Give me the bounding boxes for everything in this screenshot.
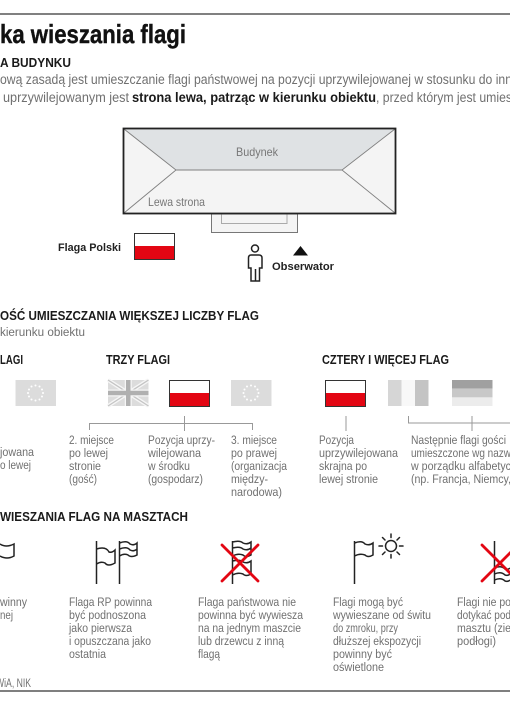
label: left side: Lewa strona (148, 195, 205, 209)
caption: o lewej (0, 458, 31, 472)
intro text (0, 72, 510, 106)
heading: four or more flags: CZTERY I WIĘCEJ FLAG (322, 352, 449, 367)
flag: Poland (134, 234, 174, 260)
caption (457, 595, 510, 648)
caption: lub drzewcu z inną (198, 634, 284, 648)
caption: powinny być (333, 647, 392, 661)
group: three flags (69, 352, 287, 499)
label: observer: Obserwator (272, 261, 335, 273)
caption: privileged centre (147, 433, 215, 486)
flag: EU (16, 380, 56, 406)
rule: no touching ground (457, 541, 510, 648)
rule: dawn to dusk (332, 534, 431, 674)
building roof (124, 128, 396, 214)
icon: flag and sun (354, 534, 403, 584)
caption: second place: po lewej (69, 446, 108, 460)
flag: EU right (231, 380, 272, 406)
caption (0, 595, 28, 622)
caption: third place: (organizacja (231, 459, 287, 473)
caption: third place: 3. miejsce (231, 433, 277, 447)
caption: wywieszane od świtu (332, 608, 431, 622)
caption: dłuższej ekspozycji (333, 634, 421, 648)
caption: privileged centre: (gospodarz) (148, 472, 203, 486)
caption: Flaga państwowa nie (198, 595, 296, 609)
caption (198, 595, 303, 661)
caption: na na jednym maszcie (198, 621, 301, 635)
caption: second place (69, 433, 114, 486)
flag: Germany grey (452, 380, 492, 406)
caption: third place: między- (231, 472, 268, 486)
caption (332, 595, 431, 674)
label: Polish flag: Flaga Polski (58, 242, 121, 254)
rule: first raised (68, 541, 152, 661)
caption: guest flags (410, 433, 510, 486)
icon: crossed drooping flag (482, 541, 510, 584)
caption: do zmroku, przy (333, 621, 399, 635)
flag: Poland centre (170, 380, 210, 406)
caption: i opuszczana jako (69, 634, 151, 648)
icon: flag (0, 544, 14, 558)
heading: mast rules: WIESZANIA FLAG NA MASZTACH (0, 509, 188, 524)
caption (68, 595, 152, 661)
flag: France grey (388, 380, 428, 406)
heading: building section: A BUDYNKU (0, 55, 71, 70)
flag: Poland left (326, 380, 366, 406)
intro text: strona lewa, patrząc w kierunku obiektu (132, 90, 376, 106)
icon: observer (248, 245, 262, 281)
caption: privileged left: skrajna po (319, 459, 367, 473)
caption: winny (0, 595, 28, 609)
bracket (408, 416, 510, 431)
heading: three flags: TRZY FLAGI (106, 352, 170, 367)
heading: multiple flags: OŚĆ UMIESZCZANIA WIĘKSZEJ LICZBY FLAG (0, 308, 259, 323)
flag: UK (108, 380, 148, 406)
rule: partial first column (0, 544, 28, 622)
caption: privileged centre: w środku (147, 459, 190, 473)
caption: Flagi mogą być (333, 595, 403, 609)
caption: privileged centre: wilejowana (147, 446, 201, 460)
caption: podłogi) (457, 634, 496, 648)
icon: direction triangle (293, 246, 308, 256)
caption: second place: 2. miejsce (69, 433, 114, 447)
building plan diagram (124, 128, 396, 232)
group: four or more flags (319, 352, 510, 486)
building entrance (212, 214, 298, 232)
caption: jako pierwsza (68, 621, 132, 635)
intro text: uprzywilejowanym jest (3, 90, 129, 106)
caption: ostatnia (69, 647, 106, 661)
bracket (90, 416, 252, 431)
group: two flags (0, 352, 56, 472)
subheading: kierunku obiektu (0, 325, 85, 339)
caption (0, 445, 34, 472)
caption: third place: po prawej (231, 446, 277, 460)
caption: być podnoszona (69, 608, 146, 622)
caption: third place: narodowa) (231, 485, 282, 499)
caption: privileged left: lewej stronie (319, 472, 378, 486)
caption: flagą (198, 647, 220, 661)
caption: jowana (0, 445, 34, 459)
caption: second place: stronie (69, 459, 101, 473)
caption: privileged left: uprzywilejowana (319, 446, 398, 460)
caption: third place (231, 433, 287, 499)
caption: nej (0, 608, 13, 622)
rule: no shared pole (198, 541, 303, 661)
caption: oświetlone (333, 660, 384, 674)
title: ka wieszania flagi (0, 19, 186, 49)
caption: privileged centre: Pozycja uprzy- (148, 433, 215, 447)
caption: powinna być wywiesza (198, 608, 303, 622)
heading: two flags: LAGI (0, 352, 23, 367)
caption: privileged left (319, 433, 398, 486)
caption: privileged left: Pozycja (319, 433, 354, 447)
connector (345, 416, 347, 431)
label: building: Budynek (236, 145, 279, 159)
icon: crossed flags (222, 541, 258, 584)
icon: two flags (96, 541, 137, 584)
caption: second place: (gość) (69, 472, 97, 486)
caption: Flaga RP powinna (69, 595, 152, 609)
